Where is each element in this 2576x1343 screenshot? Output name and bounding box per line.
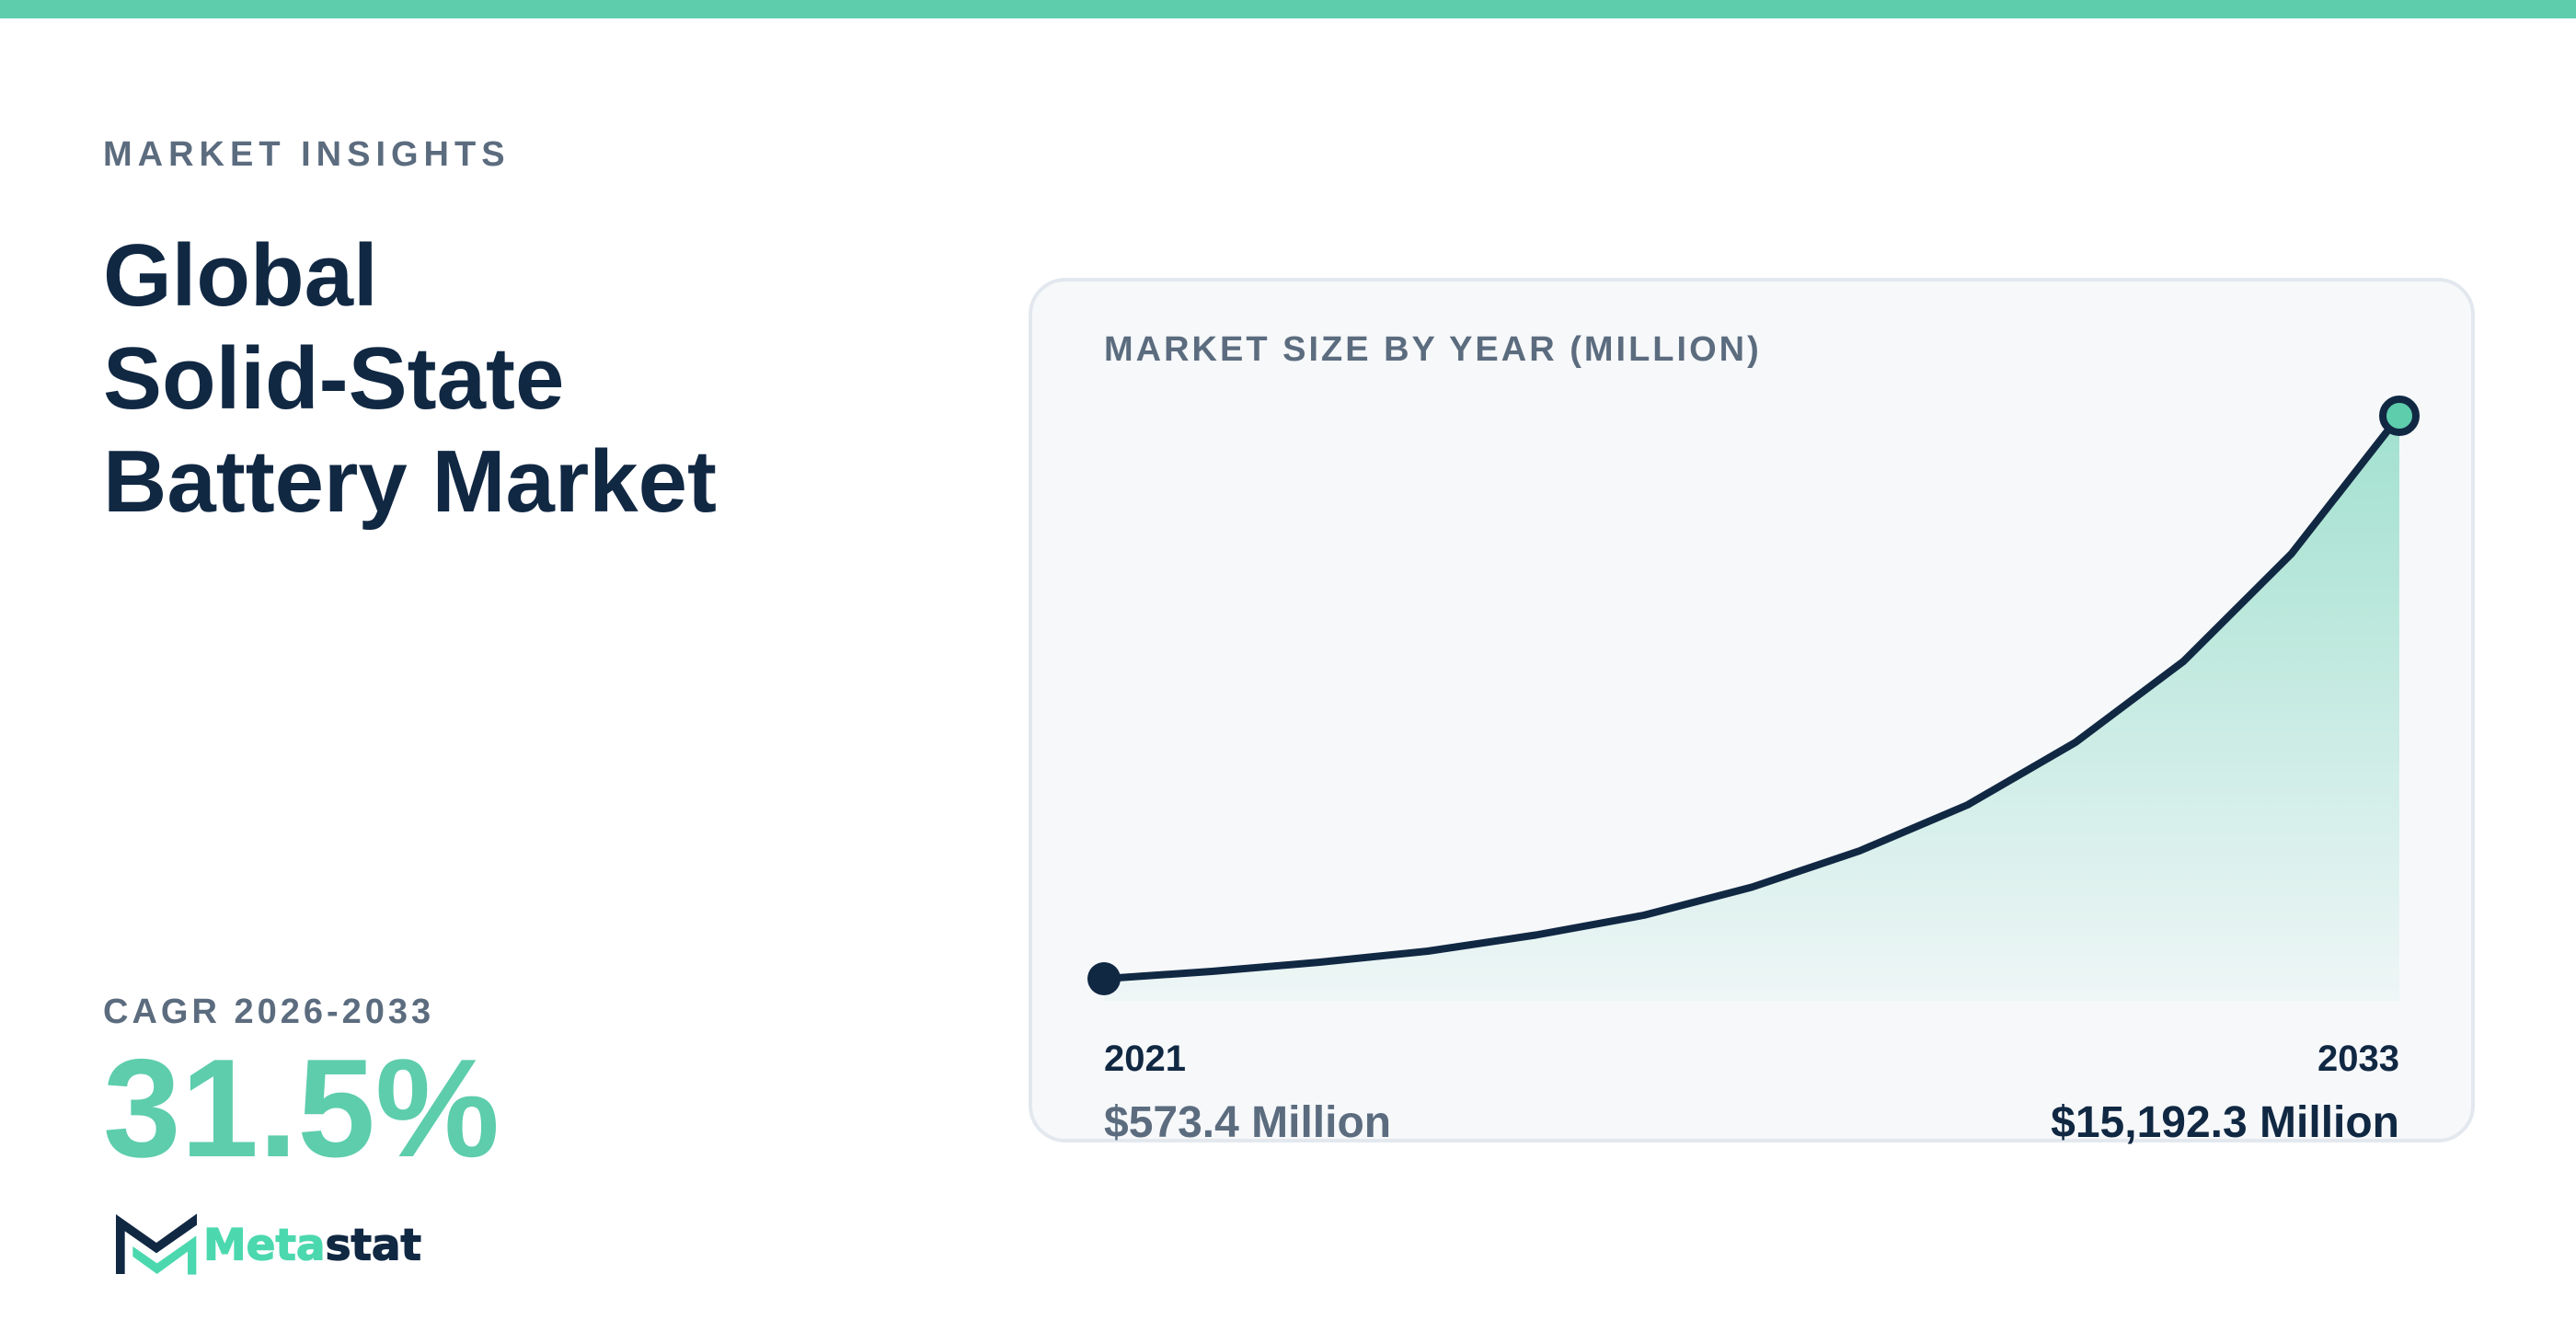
- start year: 2021: [1104, 1039, 1186, 1079]
- title: [103, 226, 717, 531]
- logo: Metastat: [116, 1213, 421, 1275]
- eyebrow label: MARKET INSIGHTS: [103, 135, 511, 174]
- title: Solid-State: [103, 329, 564, 428]
- start value: $573.4 Million: [1104, 1098, 1391, 1147]
- title: Global: [103, 226, 378, 325]
- top accent bar: [0, 0, 2576, 18]
- CAGR label: CAGR 2026-2033: [103, 993, 434, 1031]
- chart heading: MARKET SIZE BY YEAR (MILLION): [1104, 330, 1762, 369]
- title: Battery Market: [103, 432, 717, 531]
- growth line: [1104, 416, 2399, 979]
- logo wordmark: Metastat: [203, 1220, 421, 1271]
- end value: $15,192.3 Million: [2051, 1098, 2399, 1147]
- panel: market size chart card: [1029, 278, 2475, 1142]
- end year: 2033: [2317, 1039, 2399, 1079]
- end point marker: [2383, 399, 2416, 432]
- CAGR value: 31.5%: [103, 1030, 500, 1187]
- start point marker: [1087, 962, 1121, 995]
- area fill: [1104, 416, 2399, 1001]
- logo mark dark chevron: [116, 1213, 197, 1274]
- logo mark green chevron: [132, 1235, 196, 1275]
